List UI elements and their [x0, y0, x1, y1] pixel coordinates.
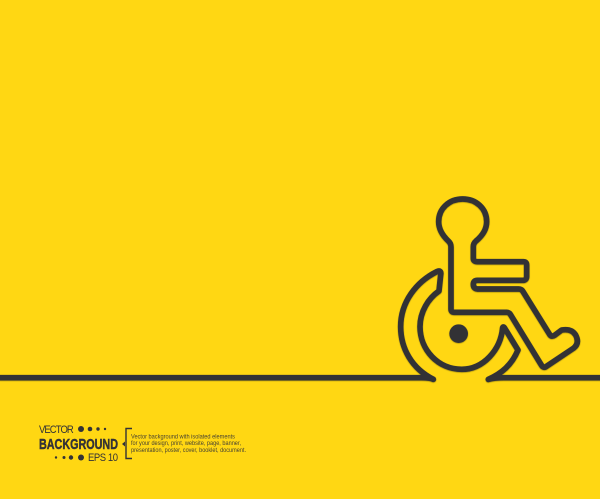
seated figure	[439, 199, 577, 367]
vector word: VECTOR	[39, 424, 75, 436]
eps 10: EPS 10	[88, 452, 118, 464]
ground line and wheel	[0, 271, 600, 379]
description text	[131, 434, 246, 454]
icon: wheelchair line art	[0, 199, 600, 379]
dots top row	[78, 426, 106, 432]
description text: for your design, print, website, page, banner,	[131, 440, 241, 447]
description text: Vector background with isolated elements	[131, 434, 235, 440]
dots bottom row	[55, 454, 84, 460]
description text: presentation, poster, cover, booklet, document.	[131, 447, 246, 454]
bracket pointer	[122, 442, 125, 446]
wheel hub	[449, 324, 468, 343]
label: vector background	[39, 424, 118, 464]
background word: BACKGROUND	[39, 435, 118, 452]
bracket	[126, 428, 132, 458]
